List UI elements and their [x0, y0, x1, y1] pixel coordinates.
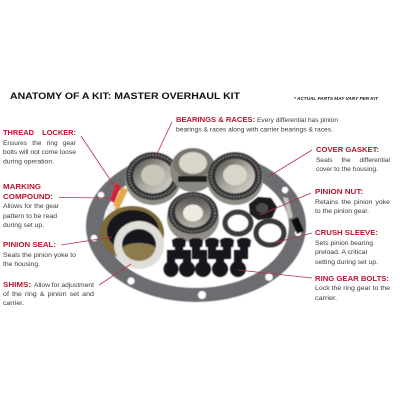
arrow: shims — [99, 264, 131, 285]
text: pinion nut — [315, 187, 390, 215]
text: cover gasket — [316, 145, 391, 173]
text: bearings and races — [176, 115, 338, 134]
text: crush sleeve: Sets pinion bearing — [315, 240, 373, 247]
arrow: pinion seal — [61, 237, 112, 245]
marking compound tube — [105, 183, 128, 214]
text: thread locker: bolts will not come loose — [3, 149, 76, 156]
arrow: ring gear bolts — [238, 270, 312, 278]
bearing: right cone — [207, 152, 263, 205]
text: thread locker: during operation. — [3, 158, 54, 166]
shim — [114, 221, 164, 269]
disclaimer note: * ACTUAL PARTS MAY VARY PER KIT — [294, 96, 378, 101]
title: ANATOMY OF A KIT: MASTER OVERHAUL KIT — [10, 90, 240, 101]
text: bearings and races: Every differential has pinion — [257, 117, 338, 124]
text: cover gasket: Seals the differential — [316, 157, 391, 164]
arrow: bearings and races — [155, 122, 172, 158]
crush sleeve and spacer rings — [225, 212, 284, 245]
text: bearings and races: bearings & races along with carrier bearings & races. — [176, 126, 333, 134]
arrow: thread locker — [81, 136, 117, 190]
ring gear bolts — [164, 238, 251, 277]
text: bearings and races: BEARINGS & RACES: — [176, 115, 255, 124]
arrow: cover gasket — [268, 150, 312, 177]
text: shims — [3, 280, 94, 307]
text: pinion nut: PINION NUT: — [315, 187, 363, 196]
text: thread locker: THREAD LOCKER: — [3, 128, 76, 137]
text: shims: of the ring & pinion set and — [3, 291, 94, 298]
gasket — [86, 145, 306, 302]
kit photo illustration — [86, 145, 306, 302]
text: shims: Allow for adjustment — [34, 282, 94, 289]
bearing: left cone — [125, 152, 181, 205]
text: cover gasket: cover to the housing. — [316, 166, 378, 173]
text: pinion nut: Retains the pinion yoke — [315, 199, 390, 206]
bearing: lower pinion — [167, 192, 219, 242]
pinion seal — [100, 206, 164, 260]
text: shims: carrier. — [3, 300, 24, 307]
text: shims: SHIMS: — [3, 280, 31, 289]
text: marking compound: COMPOUND: — [3, 192, 53, 201]
text: marking compound: pattern to be read — [3, 213, 57, 220]
text: ring gear bolts: Lock the ring gear to the — [315, 285, 390, 292]
text: marking compound — [3, 182, 60, 229]
text: pinion seal: PINION SEAL: — [3, 240, 56, 249]
text: pinion seal — [3, 240, 76, 268]
arrow: crush sleeve — [274, 233, 312, 243]
bearing: middle race — [170, 148, 216, 192]
arrow: marking compound — [59, 196, 112, 199]
text: marking compound: MARKING — [3, 182, 41, 191]
text: pinion seal: Seals the pinion yoke to — [3, 252, 76, 259]
text: crush sleeve: preload. A critical — [315, 249, 368, 256]
text: ring gear bolts: carrier. — [315, 295, 337, 302]
text: ring gear bolts: RING GEAR BOLTS: — [315, 274, 389, 283]
pinion nut — [249, 197, 277, 220]
text: cover gasket: COVER GASKET: — [316, 145, 379, 154]
text: thread locker — [3, 128, 77, 166]
text: ring gear bolts — [315, 274, 390, 302]
arrow: pinion nut — [260, 193, 311, 215]
text: thread locker: Ensures the ring gear — [3, 140, 77, 147]
text: crush sleeve — [315, 228, 378, 266]
text: crush sleeve: setting during set up. — [315, 259, 378, 266]
washer and small bolt — [283, 197, 304, 234]
text: crush sleeve: CRUSH SLEEVE: — [315, 228, 378, 237]
text: marking compound: Allows for the gear — [3, 203, 60, 210]
text: pinion nut: to the pinion gear. — [315, 208, 369, 215]
text: pinion seal: the housing. — [3, 261, 40, 268]
text: marking compound: during set up. — [3, 222, 44, 229]
